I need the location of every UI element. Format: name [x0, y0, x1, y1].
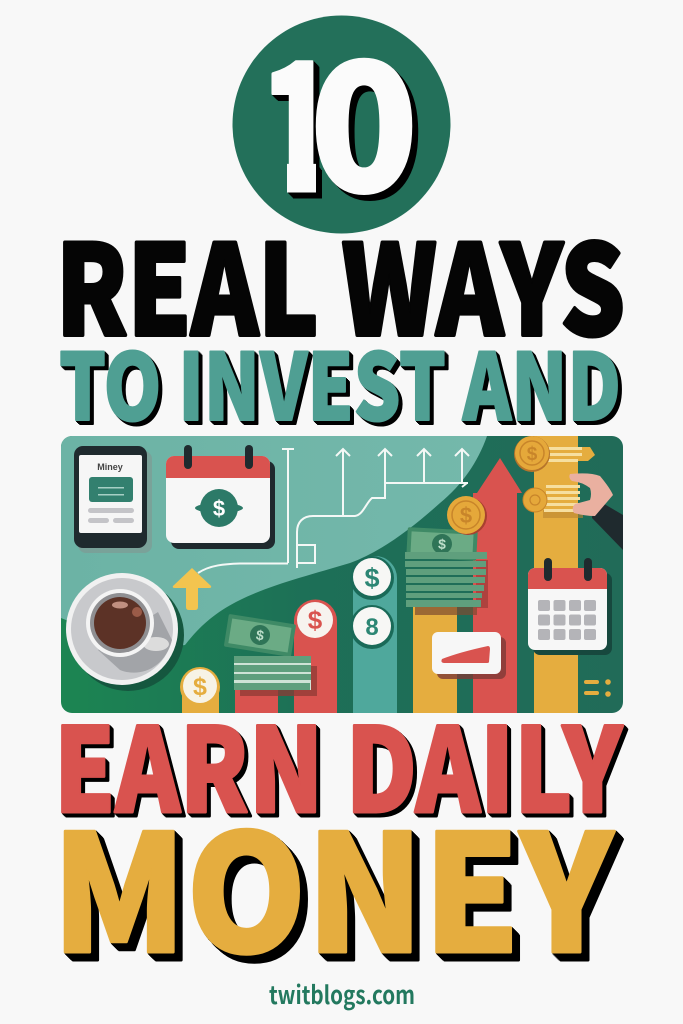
icon: calendar with dollar [166, 445, 275, 549]
bar: teal with coins [350, 556, 397, 714]
bar: teal with coins: 8 [365, 614, 379, 641]
small yellow marks [584, 679, 611, 697]
icon: calendar with dollar: $ [213, 496, 225, 521]
money stack left [224, 614, 317, 696]
bar: teal with coins: $ [364, 563, 380, 593]
arrow: red up [473, 458, 522, 714]
icon: phone [74, 446, 152, 553]
icon: coffee cup on saucer [66, 573, 184, 691]
money stack left: $ [255, 626, 265, 644]
bar: yellow with coin: $ [193, 673, 207, 701]
teal background wave [61, 436, 487, 650]
bar: red [235, 690, 278, 713]
footer: website: twitblogs.com [269, 976, 415, 1012]
bar: yellow tall [534, 436, 578, 714]
hand holding money [569, 473, 623, 550]
bar: red with coin: $ [308, 605, 323, 635]
card: white with red shape [432, 632, 506, 679]
coins and banknote stripes [514, 436, 595, 518]
icon: phone: Miney [97, 462, 123, 472]
coin: gold: $ [460, 503, 472, 528]
money stack right: $ [438, 536, 447, 552]
coin: gold [447, 496, 487, 535]
arrow: yellow up [173, 568, 211, 610]
illustration panel [61, 436, 623, 714]
growth lines with arrows [198, 449, 469, 573]
bar: yellow [413, 600, 457, 714]
number badge: 10 [232, 16, 450, 234]
icon: calendar grid [528, 558, 612, 655]
heading: MONEY: MONEY [52, 764, 615, 999]
money stack right [405, 527, 488, 615]
bar: yellow with coin [180, 667, 220, 714]
coins and banknote stripes: $ [527, 444, 538, 465]
bar: red with coin [294, 600, 337, 714]
